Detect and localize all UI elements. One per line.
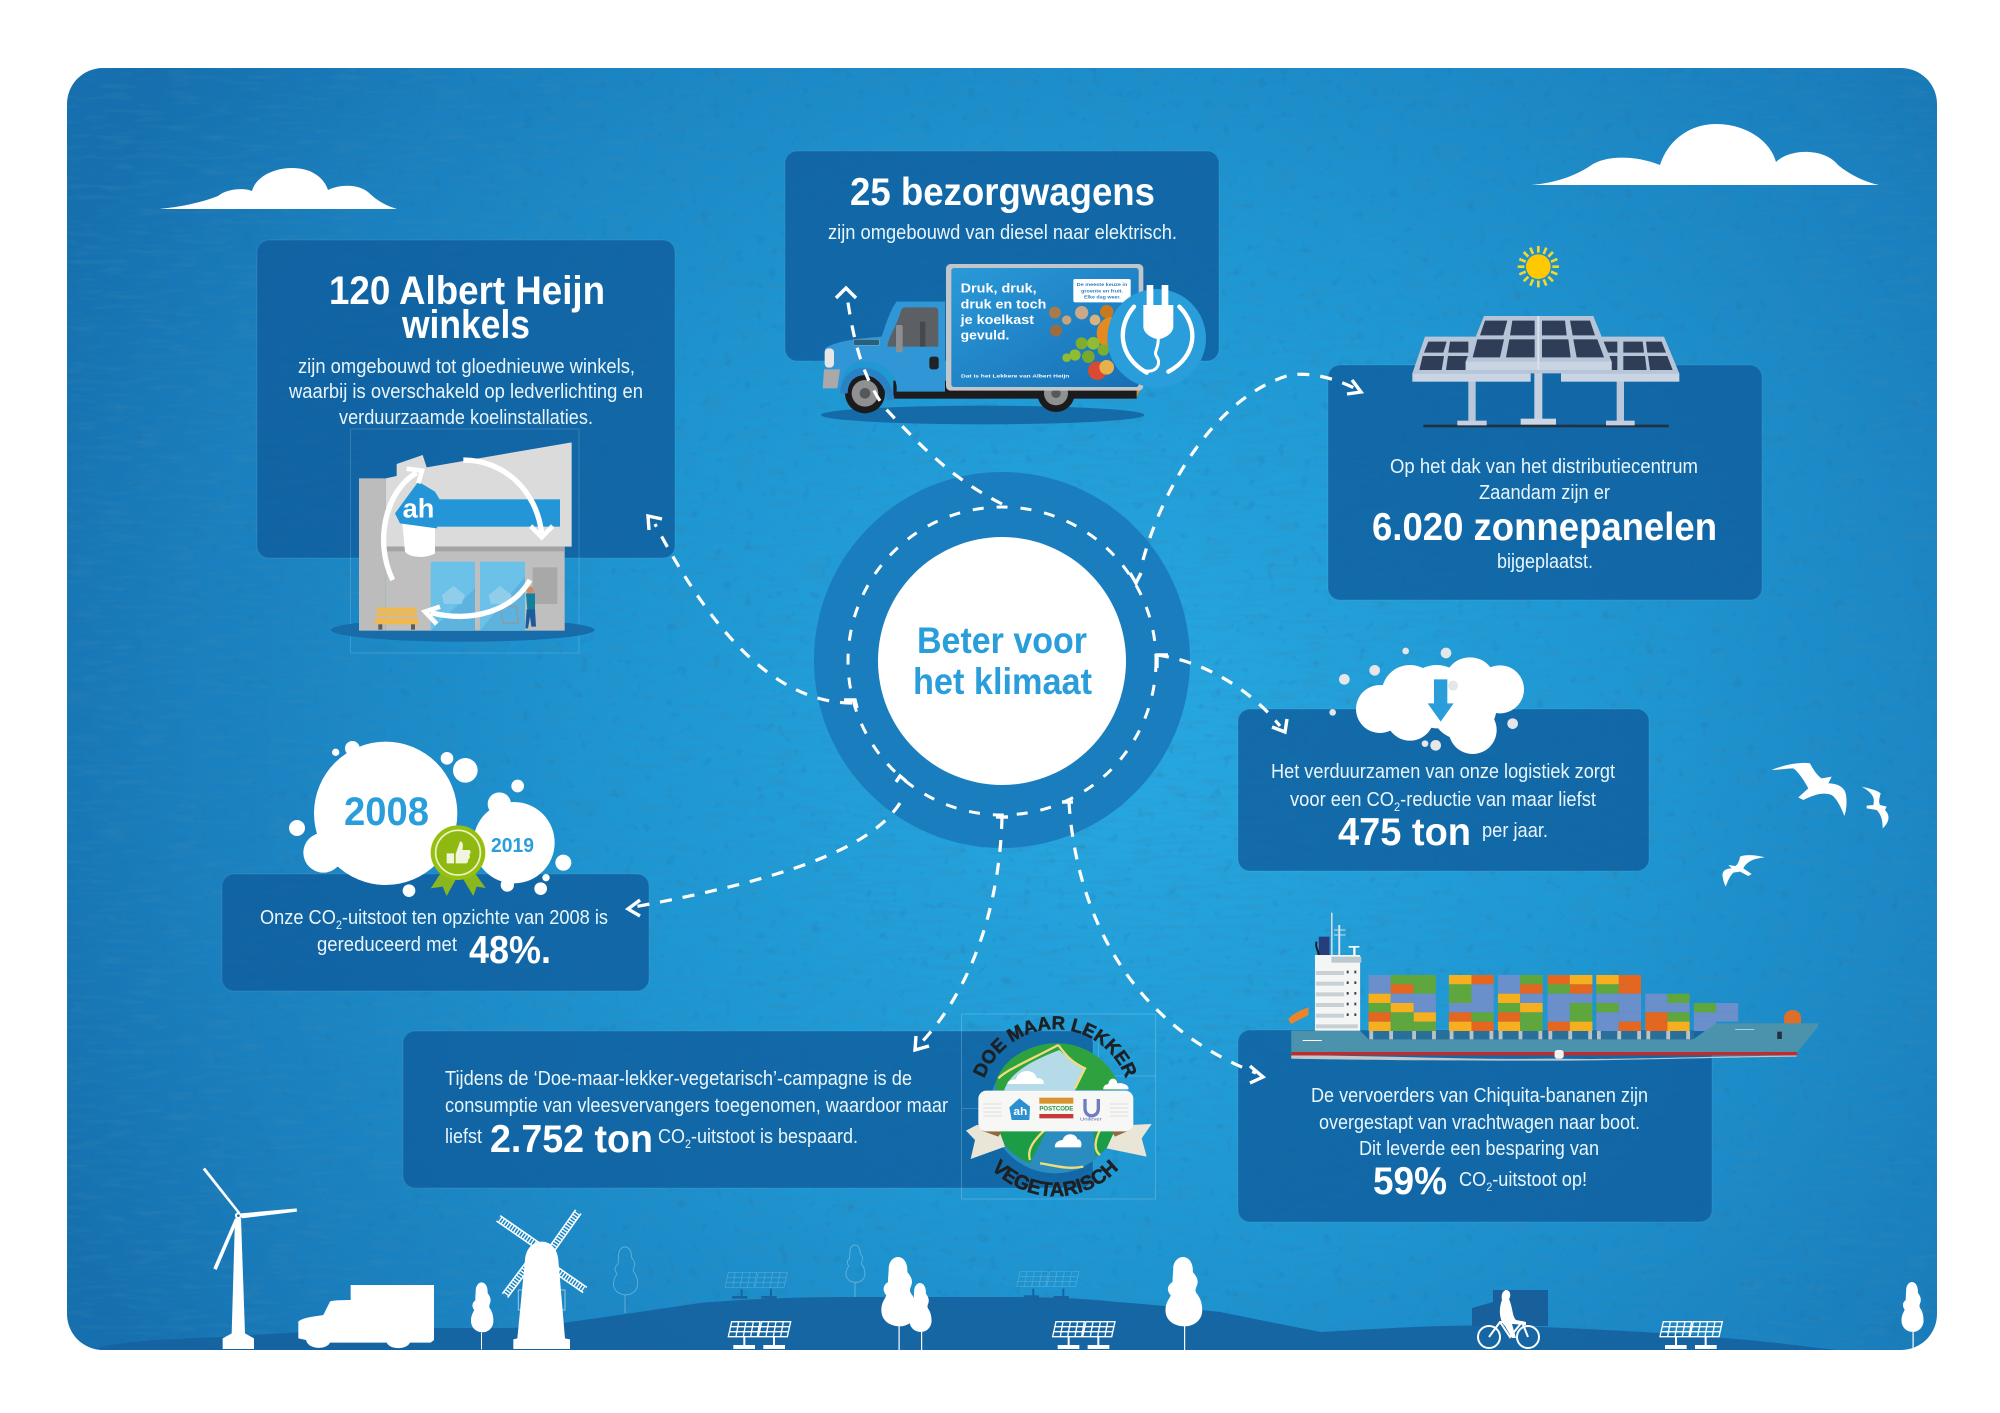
illustration: container ship <box>1288 913 1819 1061</box>
panel: 25 bezorgwagens <box>785 151 1219 424</box>
wind turbine, van, tree and windmill silhouettes <box>203 1168 585 1349</box>
title <box>913 620 1092 702</box>
logo: doe maar lekker vegetarisch: DOE MAAR LEKKER <box>972 1016 1136 1078</box>
illustration: electric truck: Elke dag weer. <box>1084 295 1121 301</box>
illustration: store with circular arrows: ah <box>403 493 434 523</box>
text block: CO <box>1459 1169 1489 1191</box>
text block: verduurzaamde koelinstallaties. <box>339 407 593 429</box>
text block: Het verduurzamen van onze logistiek zorgt <box>1271 761 1615 783</box>
text block: CO <box>658 1126 688 1148</box>
solar panels on the hill <box>728 1322 1722 1349</box>
illustration: electric truck: je koelkast <box>960 312 1035 327</box>
text block <box>1271 761 1615 814</box>
text block: De vervoerders van Chiquita-bananen zijn <box>1311 1085 1648 1107</box>
key figure: 59% <box>1373 1160 1447 1203</box>
ghost van and cyclist <box>1472 1290 1548 1348</box>
text block: 2 <box>336 918 342 932</box>
icon: thumbs up badge <box>431 825 486 896</box>
text block: per jaar. <box>1482 820 1548 842</box>
text block: Onze CO <box>260 907 343 929</box>
central circle with dashed ring <box>814 472 1190 848</box>
logo: doe maar lekker vegetarisch <box>961 1014 1156 1200</box>
key figure: 6.020 zonnepanelen <box>1372 506 1717 549</box>
illustration: electric truck: druk en toch <box>961 296 1046 311</box>
arrow: to stores <box>648 516 857 708</box>
text block: Op het dak van het distributiecentrum <box>1390 456 1698 478</box>
arrow: to Chiquita panel <box>1062 802 1263 1083</box>
text block <box>288 356 643 429</box>
logo: doe maar lekker vegetarisch: Unilever <box>1080 1116 1102 1121</box>
panel: vegetarisch campagne <box>402 1014 1156 1200</box>
text block: -uitstoot ten opzichte van 2008 is <box>342 907 608 929</box>
containers <box>1369 975 1738 1031</box>
bubbles: 2008 and 2019 <box>289 741 571 897</box>
text block <box>1390 456 1698 504</box>
windmill <box>498 1212 585 1349</box>
text block: -reductie van maar liefst <box>1400 789 1596 811</box>
birds <box>1722 763 1888 887</box>
text block <box>260 907 608 956</box>
icon: sun <box>1518 246 1559 287</box>
text block <box>1311 1085 1648 1160</box>
arrow: to vegetarian panel <box>915 817 1008 1050</box>
text block: overgestapt van vrachtwagen naar boot. <box>1319 1112 1640 1134</box>
text block: -uitstoot is bespaard. <box>691 1126 858 1148</box>
key figure: 2.752 ton <box>490 1118 653 1161</box>
text block: waarbij is overschakeld op ledverlichting en <box>288 381 643 403</box>
illustration: electric truck: De meeste keuze in <box>1077 282 1127 288</box>
arrowhead: on ring at upper right <box>1130 573 1141 583</box>
arrow: to solar panels <box>1143 374 1361 560</box>
illustration: solar panels <box>1412 316 1679 427</box>
text block: Tijdens de ‘Doe-maar-lekker-vegetarisch’-campagne is de <box>445 1068 912 1090</box>
text block: Zaandam zijn er <box>1479 482 1610 504</box>
cloud: top left <box>159 168 397 209</box>
title: Beter voor <box>917 620 1087 661</box>
tree beside van <box>471 1282 493 1349</box>
text block <box>445 1068 948 1148</box>
text block: -uitstoot op! <box>1492 1169 1587 1191</box>
illustration: electric truck: gevuld. <box>961 327 1009 342</box>
panel: 59 procent CO2 <box>1238 913 1819 1222</box>
trees on the hill <box>881 1257 1924 1350</box>
text block: liefst <box>445 1126 482 1148</box>
ghost trees and solar panels <box>614 1245 1079 1313</box>
text block: 2 <box>1486 1180 1493 1194</box>
logo: doe maar lekker vegetarisch: POSTCODE <box>1039 1106 1073 1113</box>
text block: zijn omgebouwd van diesel naar elektrisch. <box>828 222 1177 244</box>
panel: 6.020 zonnepanelen <box>1328 246 1762 600</box>
arrow: to delivery trucks <box>836 288 1002 504</box>
panel: 48 procent reductie <box>222 741 649 991</box>
illustration: electric truck: Dat is het Lekkere van Albert Heijn <box>961 374 1069 380</box>
illustration: electric truck: groente en fruit. <box>1081 288 1124 294</box>
text block: gereduceerd met <box>317 934 457 956</box>
hill <box>94 1297 1836 1350</box>
bubbles: 2008 and 2019: 2008 <box>344 790 429 834</box>
key figure: 48%. <box>469 929 551 972</box>
illustration: electric truck: Druk, druk, <box>961 281 1037 296</box>
delivery van silhouette <box>298 1285 434 1348</box>
key figure: 475 ton <box>1338 811 1471 854</box>
heading: 25 bezorgwagens <box>850 171 1155 214</box>
illustration: electric truck <box>821 264 1206 424</box>
arrow: to logistics <box>1157 655 1287 732</box>
heading line two: winkels <box>401 303 530 347</box>
logo: doe maar lekker vegetarisch: VEGETARISCH <box>994 1158 1118 1197</box>
text block: bijgeplaatst. <box>1497 551 1593 573</box>
panel: 120 Albert Heijn winkels <box>257 240 675 653</box>
illustration: store with circular arrows <box>331 429 594 653</box>
text block: zijn omgebouwd tot gloednieuwe winkels, <box>298 356 635 378</box>
text block: consumptie van vleesvervangers toegenomen, waardoor maar <box>445 1095 948 1117</box>
text block: 2 <box>1394 800 1400 814</box>
text block: 2 <box>685 1137 691 1151</box>
landscape silhouettes along the bottom <box>67 1168 1937 1360</box>
wind turbine <box>203 1168 297 1349</box>
panel: 475 ton <box>1238 648 1649 871</box>
heading: 120 Albert Heijn <box>329 269 605 313</box>
logo: doe maar lekker vegetarisch: ah <box>1013 1106 1027 1118</box>
text block: voor een CO <box>1290 789 1403 811</box>
cloud: top right <box>1531 124 1879 185</box>
text block: Dit leverde een besparing van <box>1359 1138 1599 1160</box>
arrow: to 48 percent panel <box>628 776 906 916</box>
title: het klimaat <box>913 661 1092 702</box>
icon: cloud with down arrow <box>1329 648 1524 754</box>
bubbles: 2008 and 2019: 2019 <box>491 835 534 857</box>
